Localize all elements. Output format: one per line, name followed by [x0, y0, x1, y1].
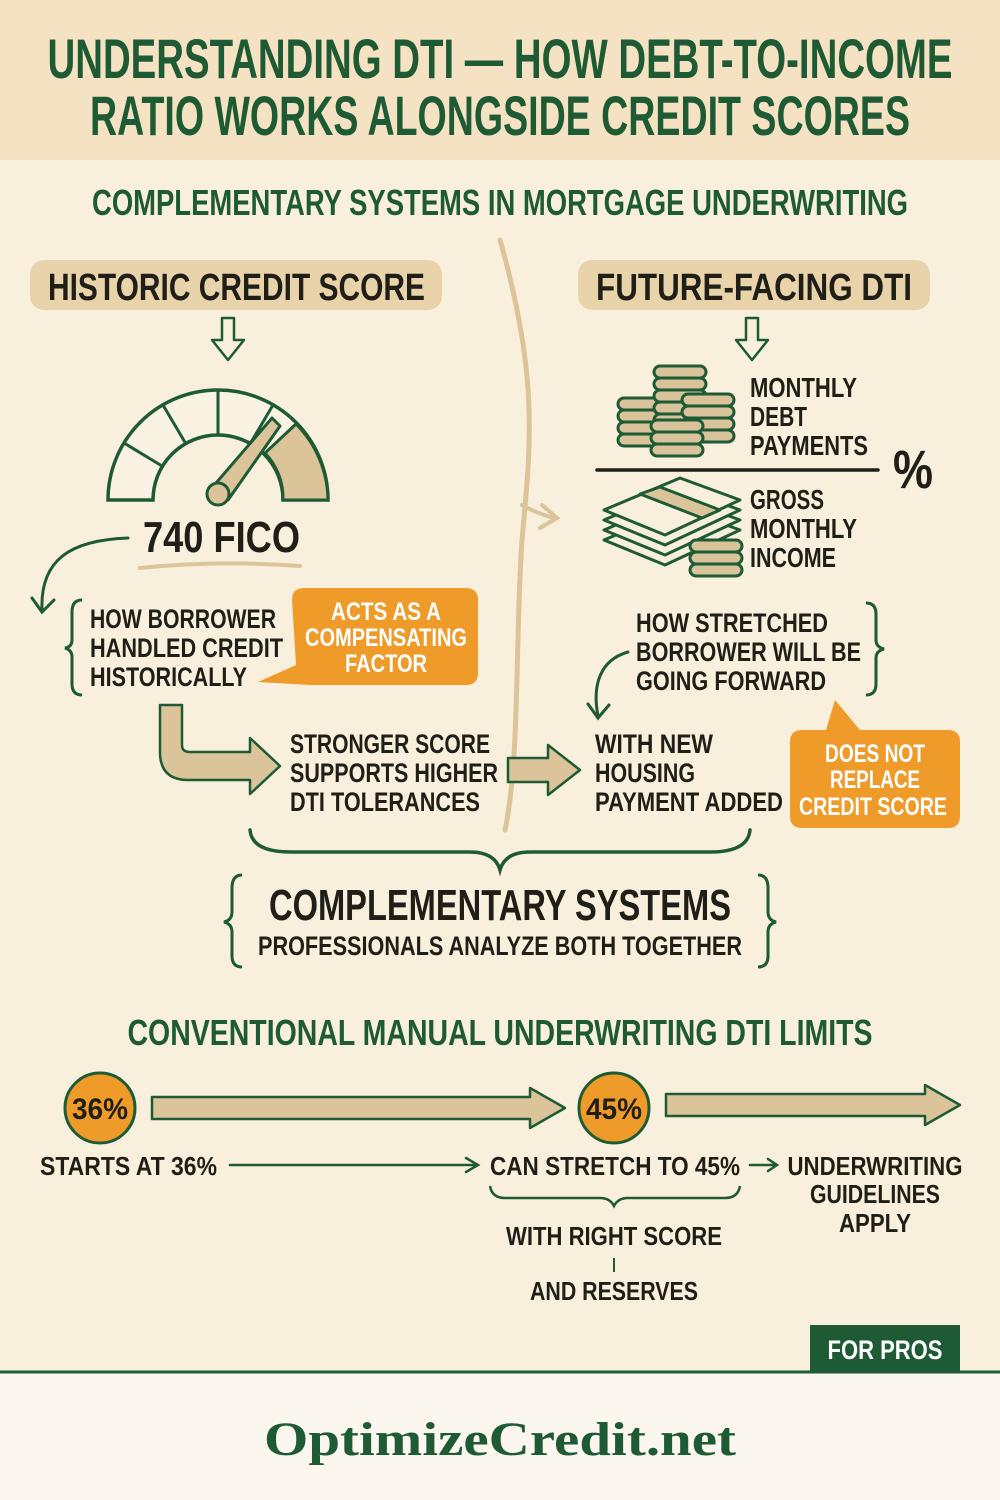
text: how borrower handled credit: HISTORICALLY [90, 662, 247, 692]
text: with new housing payment: WITH NEW [595, 729, 713, 759]
brace under stretch [490, 1186, 740, 1206]
text: monthly debt payments: PAYMENTS [750, 430, 868, 461]
callout: does not replace: REPLACE [830, 766, 920, 794]
title band [0, 0, 1000, 160]
header: historic credit score [30, 260, 442, 310]
callout: compensating factor: FACTOR [345, 650, 427, 678]
arrow: 36 to 45 [152, 1088, 565, 1128]
text: monthly debt payments: MONTHLY [750, 372, 857, 403]
text: underwriting guidelines apply: APPLY [839, 1208, 911, 1238]
text: with new housing payment: PAYMENT ADDED [595, 787, 783, 817]
footer background [0, 1372, 1000, 1500]
central divider curve [500, 240, 557, 830]
text: how borrower handled credit: HANDLED CREDIT [90, 633, 283, 663]
text: how stretched borrower: HOW STRETCHED [636, 608, 828, 638]
callout: does not replace: CREDIT SCORE [799, 793, 947, 821]
text: gross monthly income: INCOME [750, 542, 836, 573]
text: monthly debt payments [750, 372, 868, 461]
bottom brace [250, 830, 750, 870]
text: how stretched borrower: GOING FORWARD [636, 666, 826, 696]
badge 36%: 36% [72, 1093, 128, 1126]
text: stronger score [290, 729, 498, 817]
callout: does not replace: DOES NOT [825, 740, 925, 768]
callout: does not replace [790, 700, 960, 828]
badge 36% [65, 1073, 135, 1143]
text: how stretched borrower [636, 603, 884, 696]
text: with new housing payment [595, 729, 783, 817]
icon: gauge [108, 390, 328, 505]
text: how stretched borrower: BORROWER WILL BE [636, 637, 861, 667]
text: with right score and reserves: WITH RIGHT SCORE [506, 1221, 722, 1251]
text: with right score and reserves [506, 1221, 722, 1306]
text: stronger score: DTI TOLERANCES [290, 787, 480, 817]
badge: for pros [810, 1325, 960, 1372]
arrow: middle [508, 745, 580, 795]
icon: coins [618, 366, 734, 456]
footer brand: OptimizeCredit.net [264, 1413, 736, 1466]
text: with new housing payment: HOUSING [595, 758, 695, 788]
complementary systems block [224, 875, 776, 967]
complementary systems block: COMPLEMENTARY SYSTEMS [269, 881, 731, 930]
text: gross monthly income [750, 484, 857, 573]
header: historic credit score: HISTORIC CREDIT SCORE [48, 267, 425, 309]
complementary systems block: PROFESSIONALS ANALYZE BOTH TOGETHER [258, 931, 742, 961]
text: gross monthly income: GROSS [750, 484, 824, 515]
small arrow [750, 1159, 777, 1171]
arrow: L-shaped tan [160, 705, 280, 794]
callout: compensating factor: ACTS AS A [331, 598, 441, 626]
percent sign: % [893, 440, 933, 500]
text: gross monthly income: MONTHLY [750, 513, 857, 544]
badge 45%: 45% [586, 1093, 642, 1126]
curved arrow right [588, 652, 628, 718]
text: with right score and reserves: AND RESERVES [530, 1276, 698, 1306]
text: underwriting guidelines apply: GUIDELINES [810, 1179, 940, 1209]
badge 45% [579, 1073, 649, 1143]
text: starts at 36: STARTS AT 36% [40, 1151, 217, 1181]
text: stronger score: STRONGER SCORE [290, 729, 490, 759]
text: stronger score: SUPPORTS HIGHER [290, 758, 498, 788]
thin arrow [230, 1158, 478, 1172]
arrow down left [212, 318, 244, 360]
icon: money stack [604, 478, 742, 576]
text: underwriting guidelines apply [788, 1151, 962, 1238]
fraction line [597, 468, 878, 472]
text: underwriting guidelines apply: UNDERWRITING [788, 1151, 962, 1181]
arrow down right [736, 318, 768, 360]
header: future-facing DTI: FUTURE-FACING DTI [596, 267, 912, 309]
curved arrow left [32, 538, 128, 612]
callout: compensating factor [258, 588, 478, 685]
text: monthly debt payments: DEBT [750, 401, 807, 432]
arrow: 45 onward [666, 1085, 960, 1125]
text: how borrower handled credit [65, 600, 283, 695]
badge: for pros: FOR PROS [828, 1335, 942, 1365]
callout: compensating factor: COMPENSATING [305, 624, 467, 652]
text: how borrower handled credit: HOW BORROWER [90, 604, 276, 634]
text: can stretch: CAN STRETCH TO 45% [490, 1151, 740, 1181]
740 FICO: 740 FICO [143, 513, 300, 562]
